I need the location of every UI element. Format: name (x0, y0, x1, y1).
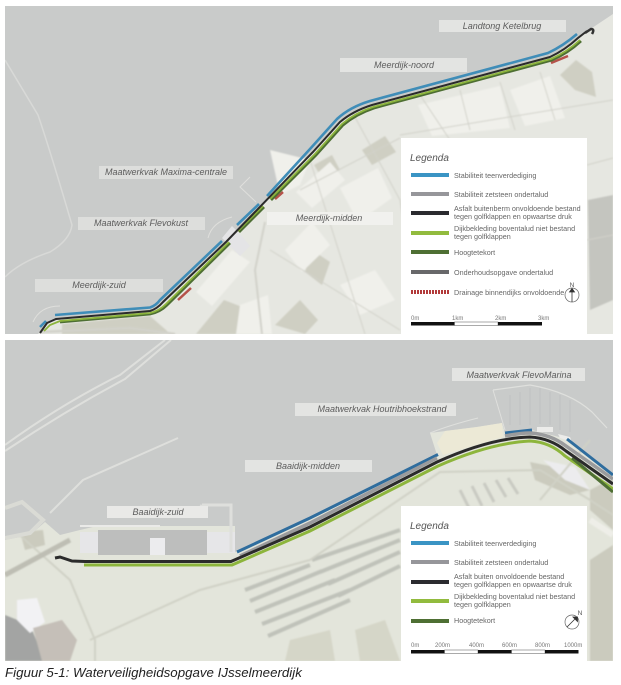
legend entry: Hoogtetekort: Hoogtetekort (454, 248, 495, 257)
scale bar: 0m (411, 643, 419, 649)
scale bar: 3km (538, 316, 549, 322)
scale bar: 600m (502, 643, 517, 649)
scale bar: 200m (435, 643, 450, 649)
label: Meerdijk-noord (340, 58, 467, 72)
label: Maatwerkvak Flevokust: Maatwerkvak Flevokust (94, 218, 189, 228)
dike: stability teen line (blue) (237, 430, 613, 552)
legend entry: Dijkbekleding boventalud (411, 592, 575, 609)
legend entry: Stabiliteit teenverdediging: Stabiliteit teenverdediging (454, 539, 536, 548)
legend entry: Asfalt buiten: tegen golfklappen en opwaartse druk (454, 580, 572, 589)
label: Maatwerkvak Maxima-centrale: Maatwerkvak Maxima-centrale (105, 167, 227, 177)
north arrow (565, 282, 579, 302)
label: Landtong Ketelbrug (439, 20, 566, 32)
scale bar (411, 316, 549, 326)
label: Baaidijk-zuid: Baaidijk-zuid (132, 507, 185, 517)
water background (5, 340, 613, 552)
panel: top legend (401, 138, 587, 334)
label: Meerdijk-midden (267, 212, 393, 225)
drainage red segments (178, 56, 568, 300)
marina piers and breakwater (430, 385, 607, 433)
caption: Figuur 5-1: Waterveiligheidsopgave IJsselmeerdijk (5, 665, 303, 680)
label: Baaidijk-midden (245, 460, 372, 472)
dams (5, 340, 178, 513)
offshore dam line (5, 60, 72, 277)
dike: asphalt line (black) (40, 31, 587, 333)
legend entry: Stabiliteit zetsteen ondertalud: Stabiliteit zetsteen ondertalud (454, 190, 548, 199)
label: Maatwerkvak FlevoMarina: Maatwerkvak FlevoMarina (466, 370, 572, 380)
label: Baaidijk-midden: Baaidijk-midden (276, 461, 340, 471)
legend entry: Dijkbekleding boventalud: tegen golfklappen (454, 232, 511, 241)
label: Meerdijk-zuid: Meerdijk-zuid (72, 280, 127, 290)
label: Baaidijk-zuid (107, 506, 208, 518)
legend entry: Stabiliteit zetsteen ondertalud (411, 190, 548, 199)
legend entry: Hoogtetekort: Hoogtetekort (454, 616, 495, 625)
dike: cladding line (light green) (44, 40, 580, 331)
panel: bottom map (5, 340, 613, 661)
north arrow: N (570, 282, 575, 289)
dike: height shortage (dark green) (572, 458, 613, 492)
legend entry: Asfalt buitenberm: tegen golfklappen en opwaartse druk (454, 212, 572, 221)
dike: cladding line (dark green edge) (60, 41, 581, 322)
marina quay (537, 427, 572, 440)
panel: top map (5, 6, 613, 334)
legend entry: Hoogtetekort (411, 248, 495, 257)
dike: cladding line (light green) (84, 441, 613, 565)
legend entry: Asfalt buiten: Asfalt buiten onvoldoende bestand (454, 572, 564, 581)
legend entry: Stabiliteit teenverdediging (411, 539, 536, 548)
map detail: south land (5, 440, 613, 661)
legend entry: Stabiliteit zetsteen ondertalud: Stabiliteit zetsteen ondertalud (454, 558, 548, 567)
harbour outlines (33, 177, 256, 322)
legend entry: Asfalt buitenberm: Asfalt buitenberm onvoldoende bestand (454, 204, 581, 213)
scale bar (411, 643, 582, 654)
scale bar: 400m (469, 643, 484, 649)
legend entry: Asfalt buitenberm (411, 204, 581, 221)
dike: stability line (blue) (40, 34, 577, 327)
land polygon (38, 14, 613, 334)
legend title: Legenda (410, 153, 449, 164)
dike: asphalt line (black) (55, 437, 613, 562)
dike end cap (585, 29, 593, 34)
legend entry: Stabiliteit teenverdediging (411, 171, 536, 180)
legend entry: Dijkbekleding boventalud (411, 224, 575, 241)
legend entry: Dijkbekleding boventalud: Dijkbekleding boventalud niet bestand (454, 224, 575, 233)
label: Maatwerkvak Houtribhoekstrand: Maatwerkvak Houtribhoekstrand (317, 404, 448, 414)
dike: zetsteen line (gray) (240, 433, 613, 556)
label: Meerdijk-midden: Meerdijk-midden (296, 213, 362, 223)
map detail: fields and patches (40, 60, 613, 334)
residential bands (245, 530, 400, 636)
water background (5, 6, 613, 334)
harbour pad (222, 226, 236, 242)
north arrow: N (578, 610, 583, 617)
legend entry: Hoogtetekort (411, 616, 495, 625)
legend title: Legenda (410, 521, 449, 532)
scale bar: 800m (535, 643, 550, 649)
scale bar: 0m (411, 316, 419, 322)
scale bar: 2km (495, 316, 506, 322)
legend entry: Stabiliteit teenverdediging: Stabiliteit teenverdediging (454, 171, 536, 180)
label: Meerdijk-zuid (35, 279, 163, 292)
legend entry: Onderhoudsopgave ondertalud: Onderhoudsopgave ondertalud (454, 268, 553, 277)
legend entry: Onderhoudsopgave ondertalud (411, 268, 553, 277)
scale bar: 1km (452, 316, 463, 322)
label: Maatwerkvak FlevoMarina (452, 368, 585, 381)
pier at left (5, 502, 43, 538)
label: Meerdijk-noord: Meerdijk-noord (374, 60, 435, 70)
legend entry: Stabiliteit zetsteen ondertalud (411, 558, 548, 567)
industrial harbour area (80, 505, 235, 555)
beach (437, 423, 503, 455)
north arrow (565, 610, 583, 629)
legend entry: Dijkbekleding boventalud: tegen golfklappen (454, 600, 511, 609)
legend entry: Dijkbekleding boventalud: Dijkbekleding boventalud niet bestand (454, 592, 575, 601)
legend entry: Asfalt buiten (411, 572, 572, 589)
panel: bottom legend (401, 506, 587, 661)
scale bar: 1000m (564, 643, 582, 649)
label: Landtong Ketelbrug: Landtong Ketelbrug (463, 21, 541, 31)
label: Maatwerkvak Flevokust (78, 217, 205, 230)
legend entry: Drainage binnendijks onvoldoende: Drainage binnendijks onvoldoende (454, 288, 564, 297)
land polygon (5, 423, 613, 661)
label: Maatwerkvak Houtribhoekstrand (295, 403, 456, 416)
